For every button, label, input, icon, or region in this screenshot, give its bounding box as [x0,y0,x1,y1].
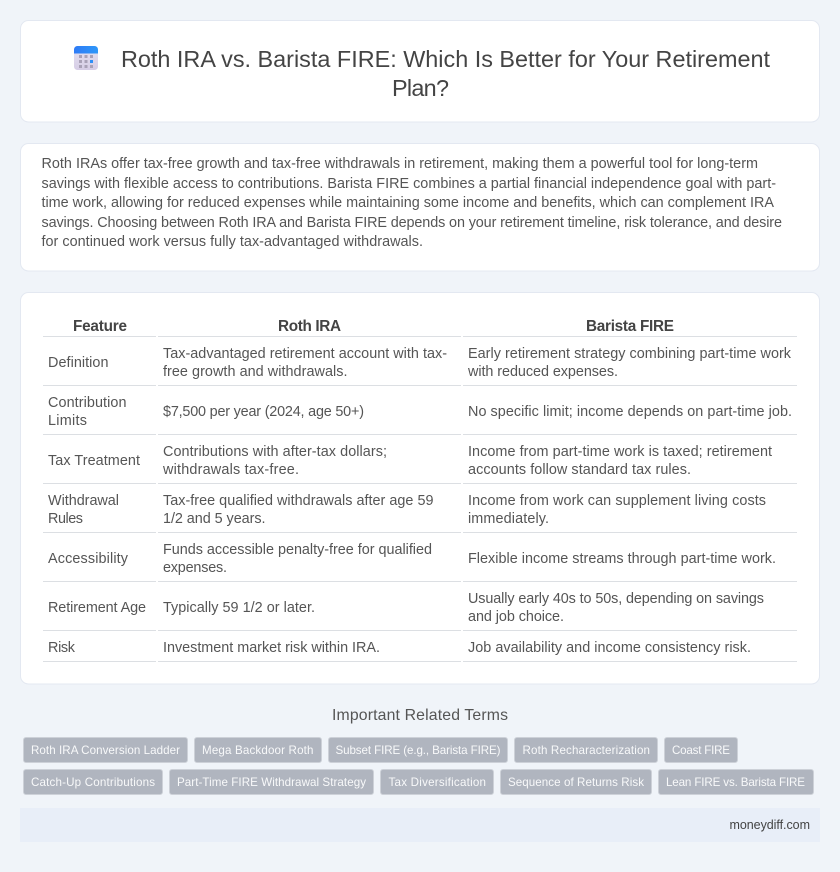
row: Contribution Limits: No specific limit; income depends on part-time job. [468,404,792,420]
intro paragraph [42,156,782,250]
row: Accessibility [43,542,797,582]
tag: Lean FIRE vs. Barista FIRE: Lean FIRE vs. Barista FIRE [666,776,805,789]
tag: Catch-Up Contributions: Catch-Up Contributions [31,776,155,789]
tag: Roth IRA Conversion Ladder: Roth IRA Conversion Ladder [31,744,180,757]
row: Contribution Limits: Contribution [48,395,126,411]
row: Tax Treatment: accounts follow standard tax rules. [468,462,691,478]
tag: Subset FIRE: Subset FIRE (e.g., Barista FIRE) [336,744,501,757]
row: Retirement Age: and job choice. [468,609,564,625]
row: Retirement Age: Retirement Age [48,600,146,616]
row: Accessibility: expenses. [163,560,227,576]
tag: Mega Backdoor Roth: Mega Backdoor Roth [202,744,314,757]
tag: Subset FIRE [328,738,508,762]
row: Definition [43,346,797,386]
row: Withdrawal Rules: Tax-free qualified withdrawals after age 59 [163,493,434,509]
row: Risk: Risk [48,640,76,656]
row: Tax Treatment: Income from part-time work is taxed; retirement [468,444,772,460]
intro paragraph: savings. Choosing between Roth IRA and Barista FIRE depends on your retirement timeline, risk tolerance, and desire [42,215,782,231]
heading: important related terms: Important Related Terms [332,707,508,724]
tag: Part-Time FIRE Withdrawal Strategy [170,770,374,794]
table header row: Feature [73,318,127,335]
row: Risk: Job availability and income consistency risk. [468,640,751,656]
table header row [43,318,797,337]
tag: Coast FIRE [664,738,738,762]
tag: Part-Time FIRE Withdrawal Strategy: Part-Time FIRE Withdrawal Strategy [177,776,366,789]
tag: Roth Recharacterization: Roth Recharacterization [522,744,650,757]
icon: calendar [74,46,98,70]
row: Contribution Limits: Limits [48,413,87,429]
row: Withdrawal Rules: Rules [48,511,83,527]
tag: Tax Diversification: Tax Diversification [388,776,486,789]
row: Withdrawal Rules: immediately. [468,511,549,527]
table header row: Roth IRA [278,318,341,335]
row: Definition: free growth and withdrawals. [163,364,348,380]
row: Accessibility: Flexible income streams through part-time work. [468,551,776,567]
row: Tax Treatment [43,444,797,484]
row: Definition: Early retirement strategy combining part-time work [468,346,792,362]
row: Retirement Age [43,591,797,631]
title [121,46,770,101]
row: Accessibility: Funds accessible penalty-free for qualified [163,542,432,558]
tag: Roth IRA Conversion Ladder [24,738,188,762]
intro paragraph: Roth IRAs offer tax-free growth and tax-free withdrawals in retirement, making them a powerful tool for long-term [42,156,758,172]
row: Withdrawal Rules: Income from work can supplement living costs [468,493,766,509]
row: Tax Treatment: withdrawals tax-free. [162,462,299,478]
tag: Tax Diversification [380,770,494,794]
tag: Lean FIRE vs. Barista FIRE [658,770,814,794]
title: Roth IRA vs. Barista FIRE: Which Is Better for Your Retirement [121,46,770,72]
table header row: Barista FIRE [586,318,674,335]
row: Retirement Age: Usually early 40s to 50s, depending on savings [468,591,764,607]
row: Tax Treatment: Contributions with after-tax dollars; [163,444,387,460]
panel: introduction [20,144,820,271]
row: Contribution Limits [43,395,797,435]
row: Contribution Limits: $7,500 per year (2024, age 50+) [163,404,364,420]
row: Risk: Investment market risk within IRA. [163,640,380,656]
panel: related term tags [24,738,814,794]
row: Definition: Definition [48,355,108,371]
panel: title header [20,20,820,122]
footer bar [20,808,820,842]
row: Tax Treatment: Tax Treatment [48,453,140,469]
row: Accessibility: Accessibility [48,551,129,567]
tag: Mega Backdoor Roth [194,738,322,762]
row: Retirement Age: Typically 59 1/2 or later. [163,600,315,616]
row: Withdrawal Rules: Withdrawal [48,493,119,509]
row: Withdrawal Rules [43,493,797,533]
tag: Sequence of Returns Risk [500,770,652,794]
title: Plan? [392,75,449,101]
intro paragraph: savings with flexible access to contributions. Barista FIRE combines a partial financial independence goal with part- [42,176,776,192]
tag: Coast FIRE: Coast FIRE [672,744,730,757]
intro paragraph: for continued work versus fully tax-advantaged withdrawals. [42,234,423,250]
panel: comparison table [20,292,820,684]
row: Withdrawal Rules: 1/2 and 5 years. [163,511,266,527]
row: Risk [43,640,797,662]
tag: Sequence of Returns Risk: Sequence of Returns Risk [508,776,644,789]
row: Definition: Tax-advantaged retirement account with tax- [163,346,447,362]
row: Definition: with reduced expenses. [467,364,618,380]
footer source text: moneydiff.com [730,818,810,832]
tag: Catch-Up Contributions [24,770,162,794]
tag: Roth Recharacterization [514,738,658,762]
intro paragraph: time work, allowing for reduced expenses while maintaining some income and benefits, which can complement IRA [42,195,774,211]
